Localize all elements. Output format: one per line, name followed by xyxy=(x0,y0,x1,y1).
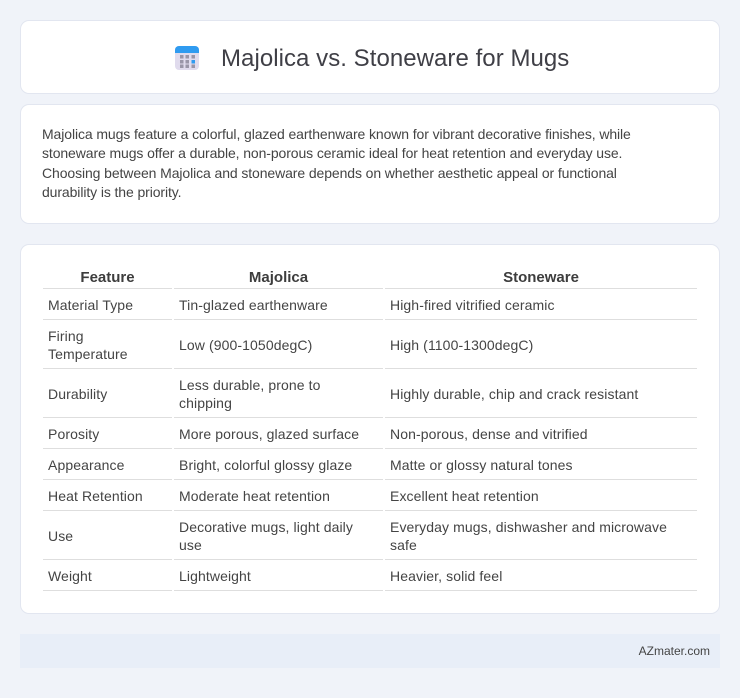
row: firing temperature: Temperature xyxy=(48,346,128,362)
row: heat retention: Excellent heat retention xyxy=(390,488,539,504)
row: firing temperature: Firing xyxy=(48,328,84,344)
footer credit: AZmater.com xyxy=(639,644,710,658)
row: use: Use xyxy=(48,528,73,544)
summary text: Choosing between Majolica and stoneware depends on whether aesthetic appeal or functional xyxy=(42,165,617,181)
summary text xyxy=(42,126,631,200)
row: durability: Highly durable, chip and crack resistant xyxy=(390,386,638,402)
row: durability: Durability xyxy=(48,386,107,402)
row: appearance: Bright, colorful glossy glaze xyxy=(179,457,352,473)
row: appearance: Matte or glossy natural tones xyxy=(390,457,573,473)
table header xyxy=(80,269,579,286)
row: porosity xyxy=(48,426,588,442)
panel: summary xyxy=(20,104,720,224)
row: material type: High-fired vitrified ceramic xyxy=(390,297,555,313)
panel: title card xyxy=(20,20,720,94)
row: porosity: Non-porous, dense and vitrified xyxy=(390,426,588,442)
row: use: Everyday mugs, dishwasher and microwave xyxy=(390,519,667,535)
row: durability: Less durable, prone to xyxy=(179,377,321,393)
summary text: Majolica mugs feature a colorful, glazed earthenware known for vibrant decorative finishes, while xyxy=(42,126,631,142)
row: material type: Tin-glazed earthenware xyxy=(179,297,328,313)
row: use: Decorative mugs, light daily xyxy=(179,519,353,535)
row: firing temperature: Low (900-1050degC) xyxy=(179,337,312,353)
summary text: durability is the priority. xyxy=(42,184,181,200)
row: heat retention xyxy=(48,488,539,504)
title: Majolica vs. Stoneware for Mugs xyxy=(221,45,569,72)
row: appearance: Appearance xyxy=(48,457,125,473)
row: porosity: More porous, glazed surface xyxy=(179,426,359,442)
table header: Stoneware xyxy=(503,269,579,286)
row: material type: Material Type xyxy=(48,297,133,313)
summary text: stoneware mugs offer a durable, non-porous ceramic ideal for heat retention and everyday use. xyxy=(42,145,622,161)
row: firing temperature xyxy=(48,328,533,362)
row: material type xyxy=(48,297,555,313)
row: heat retention: Heat Retention xyxy=(48,488,143,504)
row: use xyxy=(48,519,667,553)
row: durability xyxy=(48,377,638,411)
row: weight xyxy=(48,568,502,584)
row: heat retention: Moderate heat retention xyxy=(179,488,330,504)
row: weight: Heavier, solid feel xyxy=(390,568,502,584)
footer bar xyxy=(20,634,720,668)
table header: Feature xyxy=(80,269,135,286)
row: firing temperature: High (1100-1300degC) xyxy=(390,337,533,353)
panel: comparison table xyxy=(20,244,720,614)
icon: calendar xyxy=(175,46,199,70)
row: use: safe xyxy=(390,537,417,553)
row: weight: Weight xyxy=(48,568,92,584)
row: appearance xyxy=(48,457,573,473)
row: durability: chipping xyxy=(179,395,232,411)
row: use: use xyxy=(179,537,202,553)
row: porosity: Porosity xyxy=(48,426,99,442)
table header: Majolica xyxy=(249,269,308,286)
row: weight: Lightweight xyxy=(179,568,251,584)
